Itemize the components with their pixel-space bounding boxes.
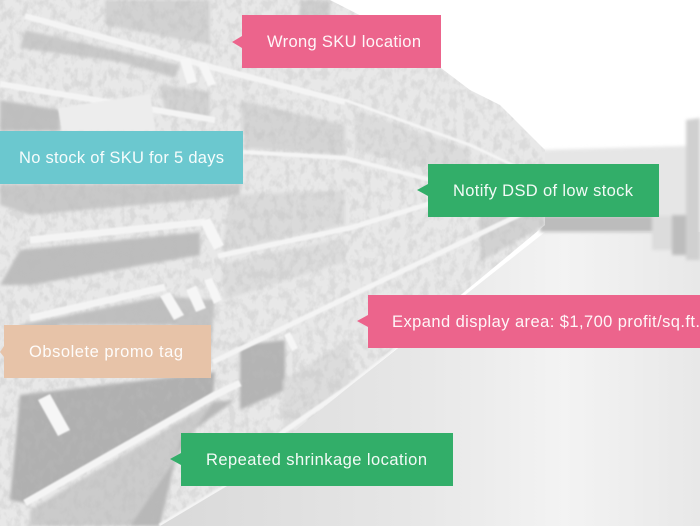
callout: Obsolete promo tag (0, 325, 211, 378)
left shelving (0, 0, 545, 526)
shelf price tags (38, 58, 298, 436)
aisle end wall and right shelf (540, 118, 700, 260)
callout: Repeated shrinkage location: Repeated shrinkage location (206, 451, 427, 469)
product texture (0, 0, 545, 526)
callout: Repeated shrinkage location (170, 433, 453, 486)
callout: Wrong SKU location (232, 15, 441, 68)
dark gaps under shelves (20, 30, 180, 78)
floor (160, 232, 700, 526)
shelf edges (0, 16, 545, 526)
callout: No stock of SKU for 5 days (0, 131, 243, 184)
callout: Expand display area (357, 295, 700, 348)
callout: Notify DSD of low stock (417, 164, 659, 217)
callout: Expand display area: Expand display area: $1,700 profit/sq.ft. (392, 313, 700, 331)
callout: Notify DSD of low stock: Notify DSD of low stock (453, 182, 634, 200)
callout: Wrong SKU location: Wrong SKU location (267, 33, 421, 51)
callout: Obsolete promo tag: Obsolete promo tag (29, 343, 183, 361)
promo sign (58, 94, 156, 131)
callout: No stock of SKU for 5 days: No stock of SKU for 5 days (19, 149, 224, 167)
